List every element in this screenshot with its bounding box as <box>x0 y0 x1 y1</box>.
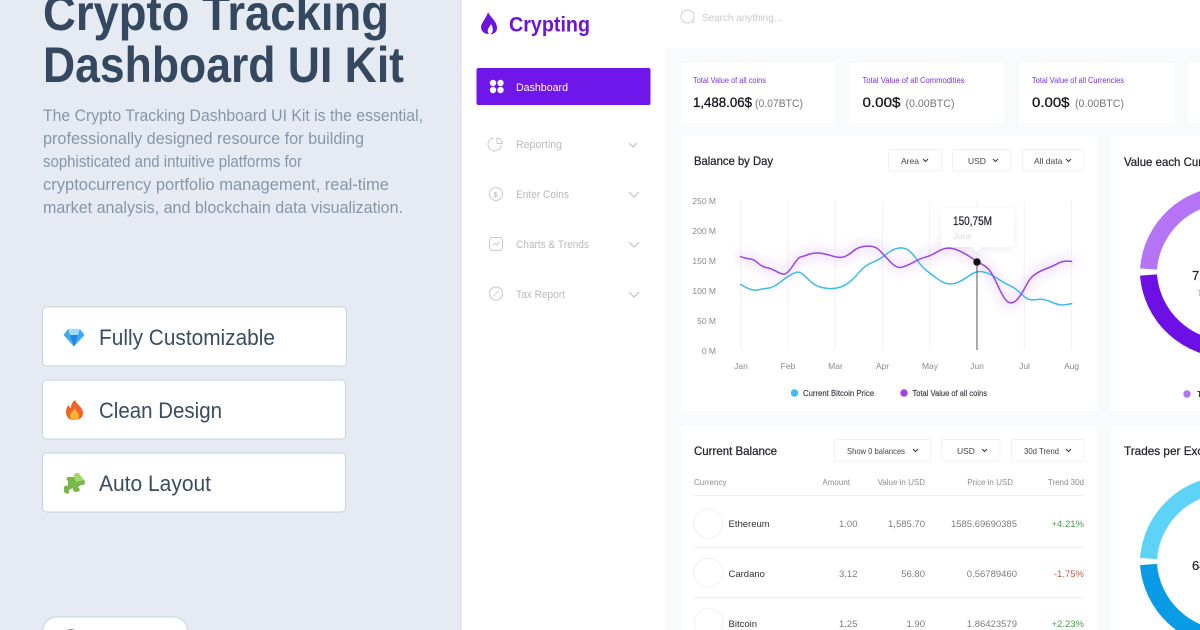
panel: main background <box>666 0 1200 630</box>
description text: sophisticated and intuitive platforms for <box>43 153 302 171</box>
table header: Price in USD <box>967 478 1013 487</box>
x axis labels: Aug <box>1064 361 1079 371</box>
row: bitcoin <box>694 608 1085 630</box>
nav item: dashboard <box>476 68 650 105</box>
row: bitcoin: 1.90 <box>906 619 925 630</box>
y axis labels: 200 M <box>692 226 716 236</box>
dropdown: 30d trend: 30d Trend <box>1024 446 1059 456</box>
row: cardano: Cardano <box>728 569 765 580</box>
y axis labels: 0 M <box>702 346 716 356</box>
description text: market analysis, and blockchain data visualization. <box>43 199 403 217</box>
donut chart <box>1148 484 1200 630</box>
panel: sidebar <box>462 0 666 630</box>
dropdown: 30d trend <box>1012 440 1084 461</box>
stat card: commodities <box>850 63 1004 123</box>
stat card: partial fourth <box>1188 63 1200 123</box>
row: bitcoin: 1.86423579 <box>967 619 1017 630</box>
nav item: tax report: Tax Report <box>516 289 565 301</box>
y axis labels: 50 M <box>697 316 716 326</box>
icon: search <box>681 10 694 23</box>
nav item: enter coins: Enter Coins <box>516 189 569 201</box>
icon: fire <box>66 400 83 420</box>
x axis labels: Mar <box>828 361 843 371</box>
panel: current balance <box>681 426 1097 630</box>
feature: auto layout <box>42 453 346 512</box>
stat card: commodities: (0.00BTC) <box>906 98 954 110</box>
row: cardano: 0.56789460 <box>967 569 1017 580</box>
series curves <box>741 246 1072 305</box>
feature: fully customizable: Fully Customizable <box>99 325 275 350</box>
legend: Current Bitcoin Price <box>803 389 875 398</box>
heading: Current Balance <box>694 444 777 458</box>
description text: cryptocurrency portfolio management, real-time <box>43 176 389 194</box>
tooltip: June <box>954 231 972 241</box>
legend <box>791 389 987 398</box>
dropdown: show 0 balances: Show 0 balances <box>847 446 905 456</box>
dropdown: area: Area <box>901 156 919 166</box>
feature: auto layout: Auto Layout <box>99 471 212 496</box>
panel: value each currency <box>1111 136 1200 411</box>
stat card: coins: Total Value of all coins <box>693 76 766 85</box>
tooltip: 150,75M <box>953 214 992 228</box>
search bar: Search anything... <box>702 12 782 24</box>
row: ethereum: +4.21% <box>1052 519 1085 530</box>
x axis labels: Apr <box>876 361 889 371</box>
description text: professionally designed resource for building <box>43 130 364 148</box>
title <box>43 0 404 93</box>
nav item: charts and trends <box>490 238 639 251</box>
row: bitcoin: 1.25 <box>839 619 858 630</box>
table header: Currency <box>694 478 726 487</box>
icon: diamond <box>64 329 84 346</box>
line chart <box>692 196 1079 398</box>
donut chart <box>1148 195 1200 349</box>
icon: grid <box>490 80 504 93</box>
row: cardano <box>694 558 1085 588</box>
stat card: coins: 1,488.06$ <box>693 94 752 110</box>
legend <box>1183 389 1200 399</box>
x axis labels: Feb <box>781 361 796 371</box>
heading: Balance by Day <box>694 154 773 168</box>
row: cardano: 56.80 <box>901 569 925 580</box>
dropdown: usd <box>942 440 1000 461</box>
x axis labels: Jul <box>1019 361 1030 371</box>
x axis labels: Jan <box>734 361 748 371</box>
row: bitcoin: +2.23% <box>1052 619 1085 630</box>
row: ethereum: 1,585.70 <box>888 519 925 530</box>
panel: product description <box>42 0 423 630</box>
description text: The Crypto Tracking Dashboard UI Kit is the essential, <box>43 107 423 125</box>
nav item: dashboard: Dashboard <box>516 82 568 94</box>
nav item: charts and trends: Charts & Trends <box>516 239 589 251</box>
row: ethereum: 1.00 <box>839 519 858 530</box>
marker line <box>976 262 978 350</box>
row: bitcoin: Bitcoin <box>728 619 757 630</box>
dropdown: usd: USD <box>968 156 986 166</box>
description text <box>43 107 423 217</box>
x axis labels <box>734 361 1079 371</box>
nav item: enter coins <box>490 188 639 201</box>
feature: fully customizable <box>42 307 346 366</box>
title: Dashboard UI Kit <box>43 37 404 93</box>
bottom pill button <box>42 617 188 630</box>
dropdown: usd: USD <box>957 446 975 456</box>
icon: puzzle piece <box>64 473 85 494</box>
feature: clean design: Clean Design <box>99 398 222 423</box>
dropdown: show 0 balances <box>834 440 931 461</box>
y axis labels: 100 M <box>692 286 716 296</box>
tooltip <box>941 208 1014 252</box>
stat card: currencies: (0.00BTC) <box>1075 98 1124 110</box>
row: ethereum <box>694 509 1085 538</box>
row: ethereum: 1585.69690385 <box>951 519 1017 530</box>
stat card: coins: (0.07BTC) <box>755 98 803 110</box>
marker dot <box>973 258 981 266</box>
y axis labels: 250 M <box>692 196 716 206</box>
dropdown: area <box>888 150 942 171</box>
dropdown: all data <box>1022 150 1084 171</box>
stat card: currencies <box>1019 63 1174 123</box>
logo text: Crypting <box>509 14 590 36</box>
table header: Value in USD <box>878 478 925 487</box>
table header: Amount <box>822 478 851 487</box>
stat card: currencies: 0.00$ <box>1032 94 1070 110</box>
stat card: commodities: 0.00$ <box>862 94 901 110</box>
panel: trades per exchange <box>1111 426 1200 630</box>
search bar <box>666 0 1200 48</box>
y axis labels: 150 M <box>692 256 716 266</box>
nav item: enter coins: $ <box>494 192 498 199</box>
feature: clean design <box>42 380 346 439</box>
panel: balance by day <box>681 136 1097 411</box>
table header: Trend 30d <box>1048 478 1084 487</box>
stat card: currencies: Total Value of all Currencies <box>1032 76 1124 85</box>
row: cardano: 3.12 <box>839 569 858 580</box>
legend: Total Value of all coins <box>912 389 987 398</box>
nav item: tax report <box>490 287 639 301</box>
dropdown: usd <box>952 150 1011 171</box>
y axis labels <box>692 196 716 356</box>
x axis labels: Jun <box>970 361 984 371</box>
x axis labels: May <box>922 361 939 371</box>
row: ethereum: Ethereum <box>728 519 770 530</box>
table header <box>694 478 1084 487</box>
stat card: commodities: Total Value of all Commodities <box>862 76 964 85</box>
row: cardano: -1.75% <box>1054 569 1085 580</box>
nav item: reporting: Reporting <box>516 139 562 151</box>
dropdown: all data: All data <box>1034 156 1063 166</box>
stat card: coins <box>681 63 835 123</box>
icon: logo flame <box>481 12 497 34</box>
nav item: reporting <box>488 138 637 151</box>
